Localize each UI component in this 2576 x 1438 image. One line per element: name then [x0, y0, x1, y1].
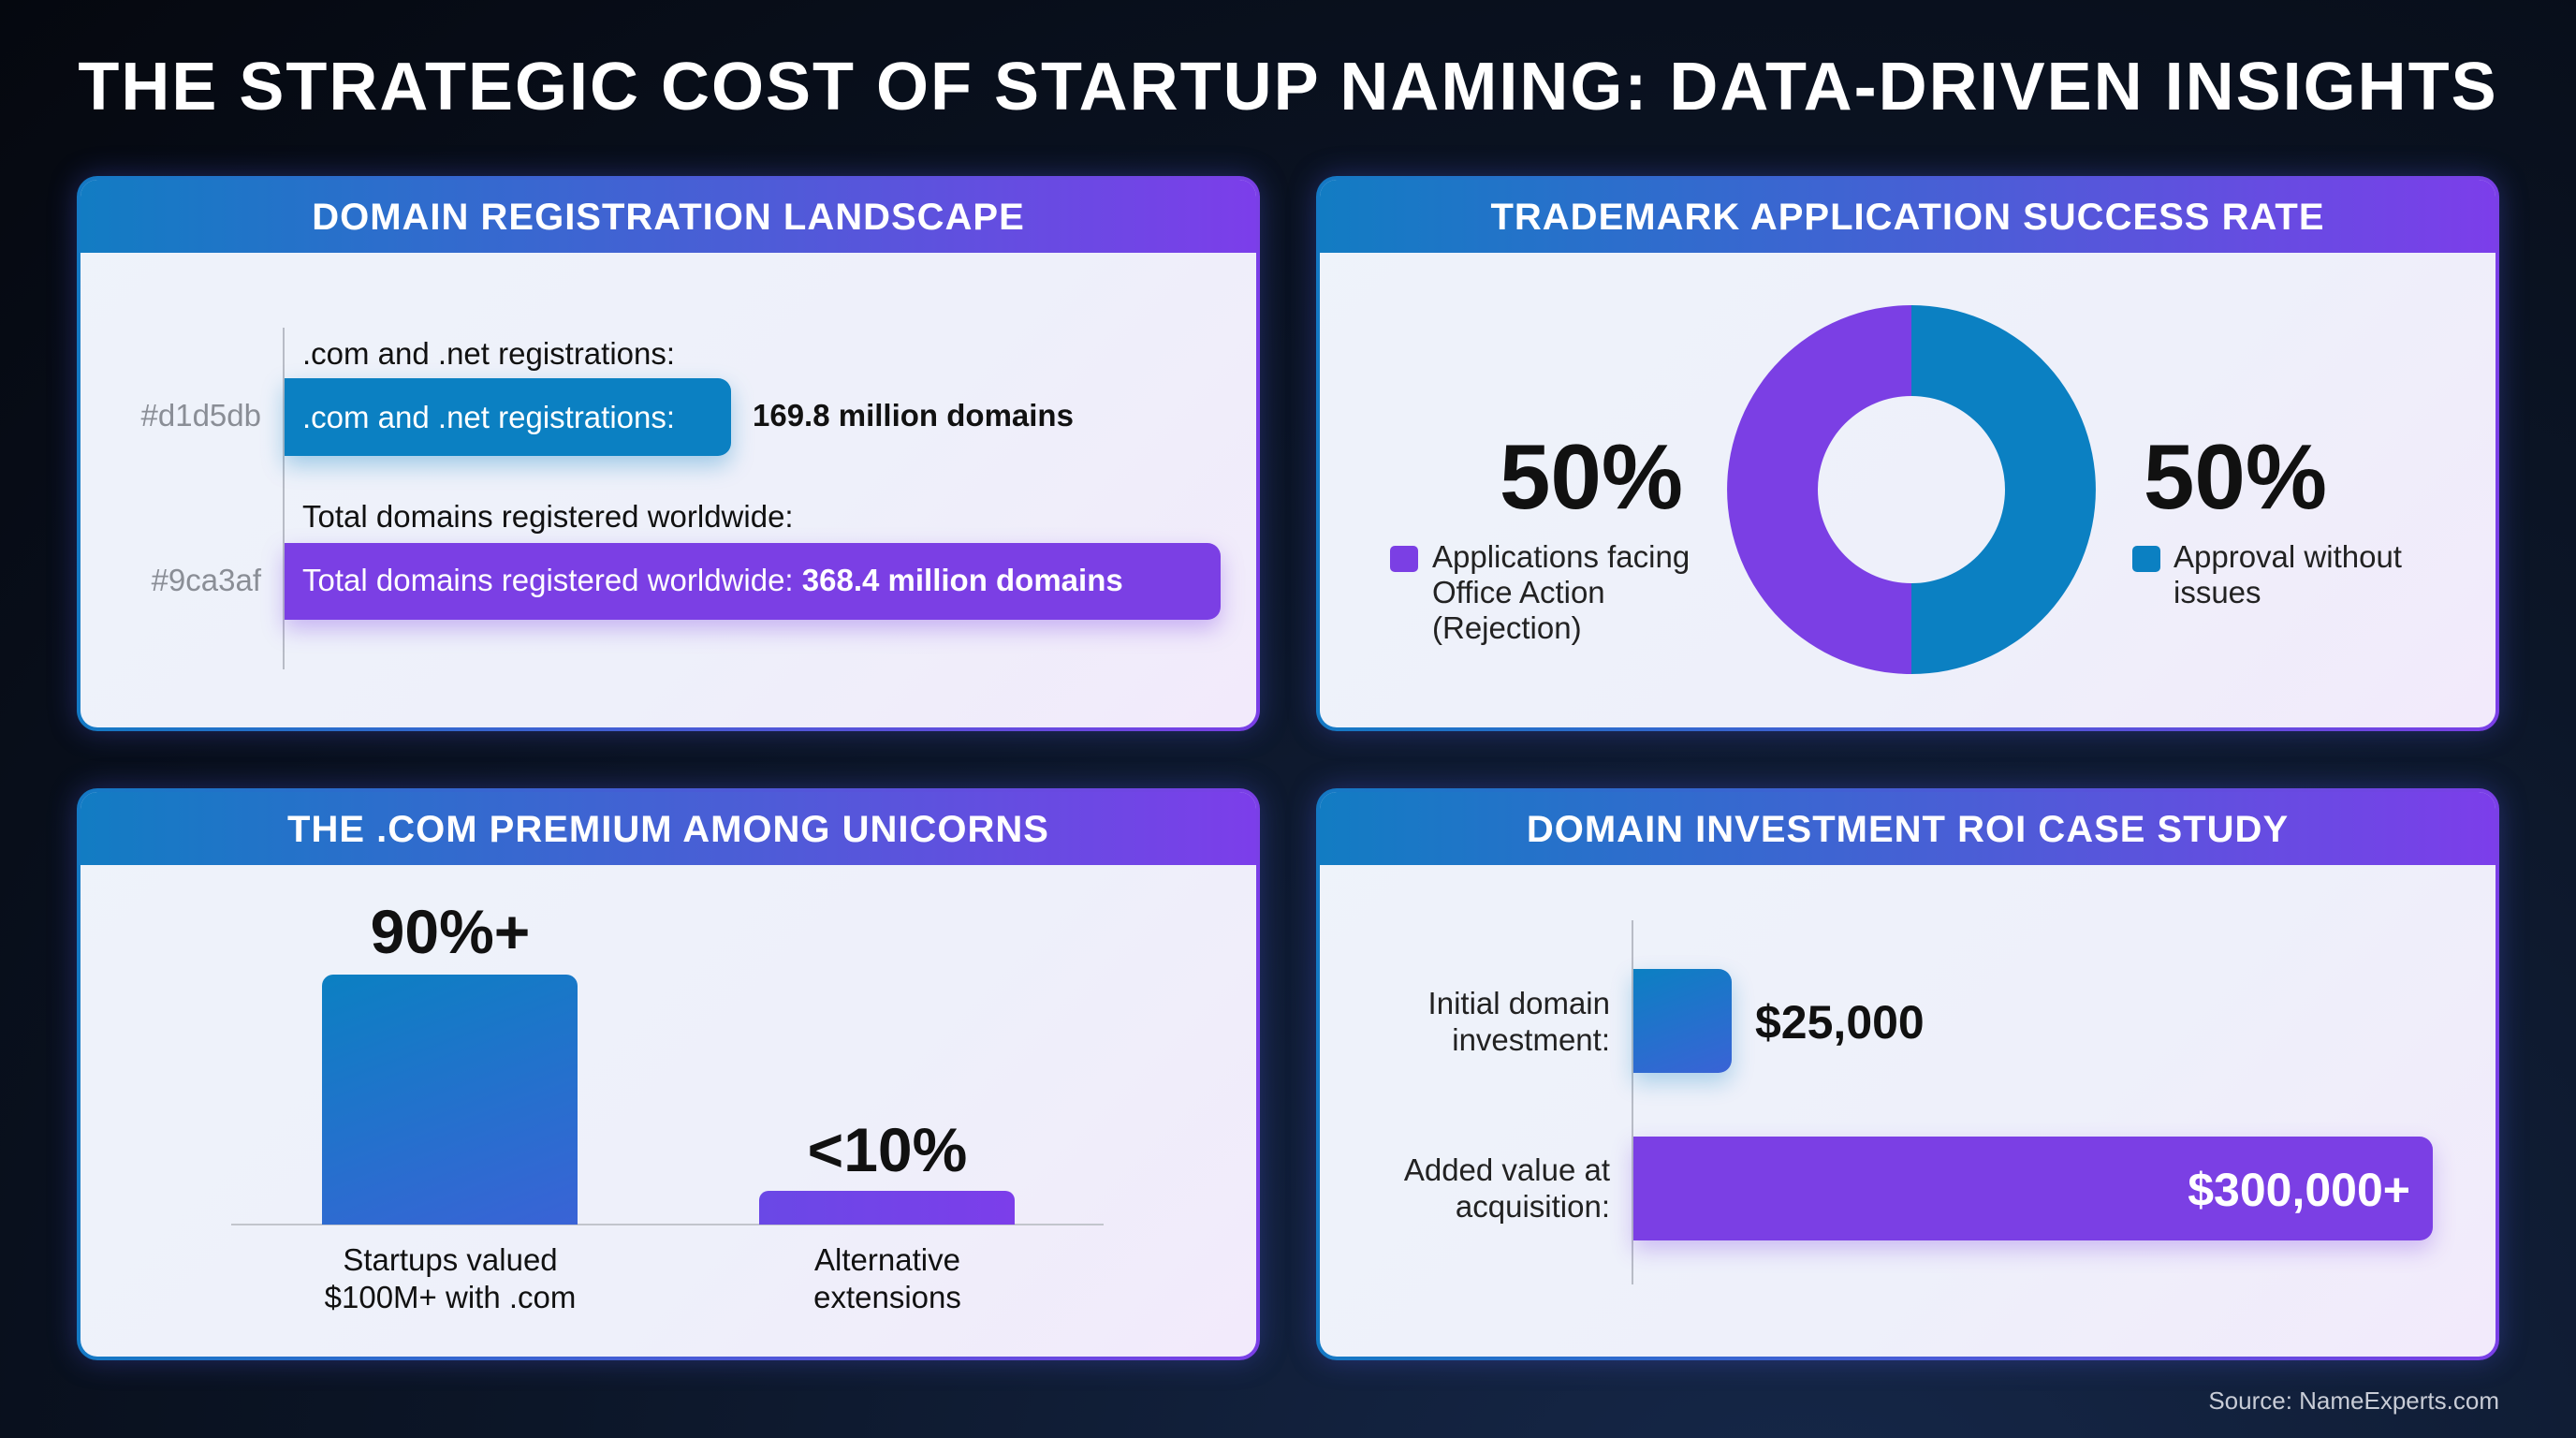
color code 2: #9ca3af — [152, 563, 261, 597]
legend left — [1390, 546, 1418, 572]
panel: trademark: Office Action — [1432, 575, 1605, 609]
value $25,000: $25,000 — [1755, 996, 1925, 1049]
panel: trademark: issues — [2174, 575, 2261, 609]
heading: TRADEMARK APPLICATION SUCCESS RATE — [1490, 197, 2325, 238]
panel: trademark: Applications facing — [1432, 539, 1690, 574]
bar: total: Total domains registered worldwide: 368.4 million domains — [302, 563, 1123, 597]
baseline — [231, 1224, 1104, 1225]
axis — [283, 328, 285, 669]
label added value: Added value at — [1404, 1152, 1610, 1187]
label: com net: .com and .net registrations: — [302, 336, 675, 371]
bar added value — [1633, 1137, 2433, 1240]
heading — [1320, 180, 2496, 253]
label: total: Total domains registered worldwide: — [302, 499, 794, 534]
heading: THE .COM PREMIUM AMONG UNICORNS — [287, 809, 1049, 850]
panel: domain registration landscape — [77, 176, 1260, 731]
label .com: Startups valued — [343, 1242, 558, 1277]
label added value: acquisition: — [1456, 1189, 1610, 1224]
label .com — [325, 1242, 576, 1314]
panel: trademark: (Rejection) — [1432, 610, 1582, 645]
panel: ROI — [1316, 788, 2499, 1360]
value: 169.8 million: 169.8 million domains — [753, 398, 1074, 433]
label initial — [1428, 986, 1610, 1057]
bar initial — [1633, 969, 1732, 1073]
bar: com net: .com and .net registrations: — [302, 400, 675, 434]
label added value — [1404, 1152, 1610, 1224]
value 90%+: 90%+ — [371, 897, 530, 966]
heading: DOMAIN INVESTMENT ROI CASE STUDY — [1527, 809, 2289, 850]
donut chart — [1727, 305, 2096, 674]
heading — [80, 792, 1256, 865]
panel: trademark: Approval without — [2174, 539, 2402, 574]
heading: DOMAIN REGISTRATION LANDSCAPE — [312, 197, 1025, 238]
bar added value: $300,000+ — [2188, 1164, 2410, 1216]
bar: .com — [322, 975, 578, 1225]
legend right — [2132, 546, 2160, 572]
label .com: $100M+ with .com — [325, 1280, 576, 1314]
right stat: 50% — [2144, 425, 2327, 528]
axis — [1632, 920, 1633, 1284]
color code 1: #d1d5db — [141, 398, 261, 433]
label alternative — [813, 1242, 961, 1314]
source: Source: NameExperts.com — [2208, 1387, 2499, 1415]
heading — [80, 180, 1256, 253]
bar: alternative — [759, 1191, 1015, 1225]
value <10%: <10% — [808, 1115, 967, 1184]
label initial: Initial domain — [1428, 986, 1610, 1020]
panel: com premium — [77, 788, 1260, 1360]
left stat: 50% — [1500, 425, 1683, 528]
title: THE STRATEGIC COST OF STARTUP NAMING: DATA-DRIVEN INSIGHTS — [78, 50, 2498, 125]
label alternative: Alternative — [814, 1242, 960, 1277]
label initial: investment: — [1452, 1022, 1610, 1057]
panel: trademark — [1316, 176, 2499, 731]
heading — [1320, 792, 2496, 865]
label alternative: extensions — [813, 1280, 961, 1314]
bar: com net — [285, 378, 731, 456]
bar: total — [285, 543, 1221, 620]
